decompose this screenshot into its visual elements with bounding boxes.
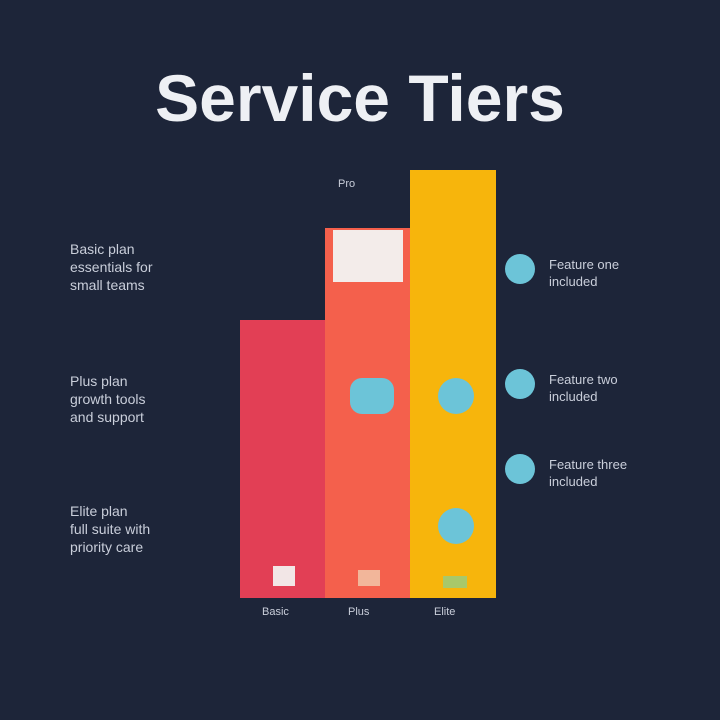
standard top box xyxy=(333,230,403,282)
feature circles xyxy=(350,378,394,414)
right features: included xyxy=(549,274,597,289)
right features: Feature one xyxy=(549,257,619,272)
left text blocks: small teams xyxy=(70,277,145,293)
left text blocks: Basic plan xyxy=(70,241,135,257)
left text blocks: essentials for xyxy=(70,259,152,275)
label above standard: Pro xyxy=(338,178,355,190)
left text blocks xyxy=(70,241,152,293)
text: Elite plan xyxy=(70,503,128,519)
text: and support xyxy=(70,409,144,425)
bar: standard xyxy=(325,228,411,598)
chart: tier bars xyxy=(240,170,496,598)
right features: Feature three xyxy=(549,457,627,472)
text: priority care xyxy=(70,539,143,555)
text: Elite xyxy=(434,606,455,618)
right features xyxy=(505,254,627,489)
right features: included xyxy=(549,474,597,489)
text: full suite with xyxy=(70,521,150,537)
text: Plus xyxy=(348,606,369,618)
right features: Feature two xyxy=(549,372,618,387)
bottom markers xyxy=(273,566,295,586)
bar: premium xyxy=(410,170,496,598)
bar labels: Basic xyxy=(262,606,289,618)
title: Service Tiers xyxy=(155,61,565,135)
text: growth tools xyxy=(70,391,145,407)
bar: basic xyxy=(240,320,326,598)
text: Plus plan xyxy=(70,373,128,389)
right features: included xyxy=(549,389,597,404)
